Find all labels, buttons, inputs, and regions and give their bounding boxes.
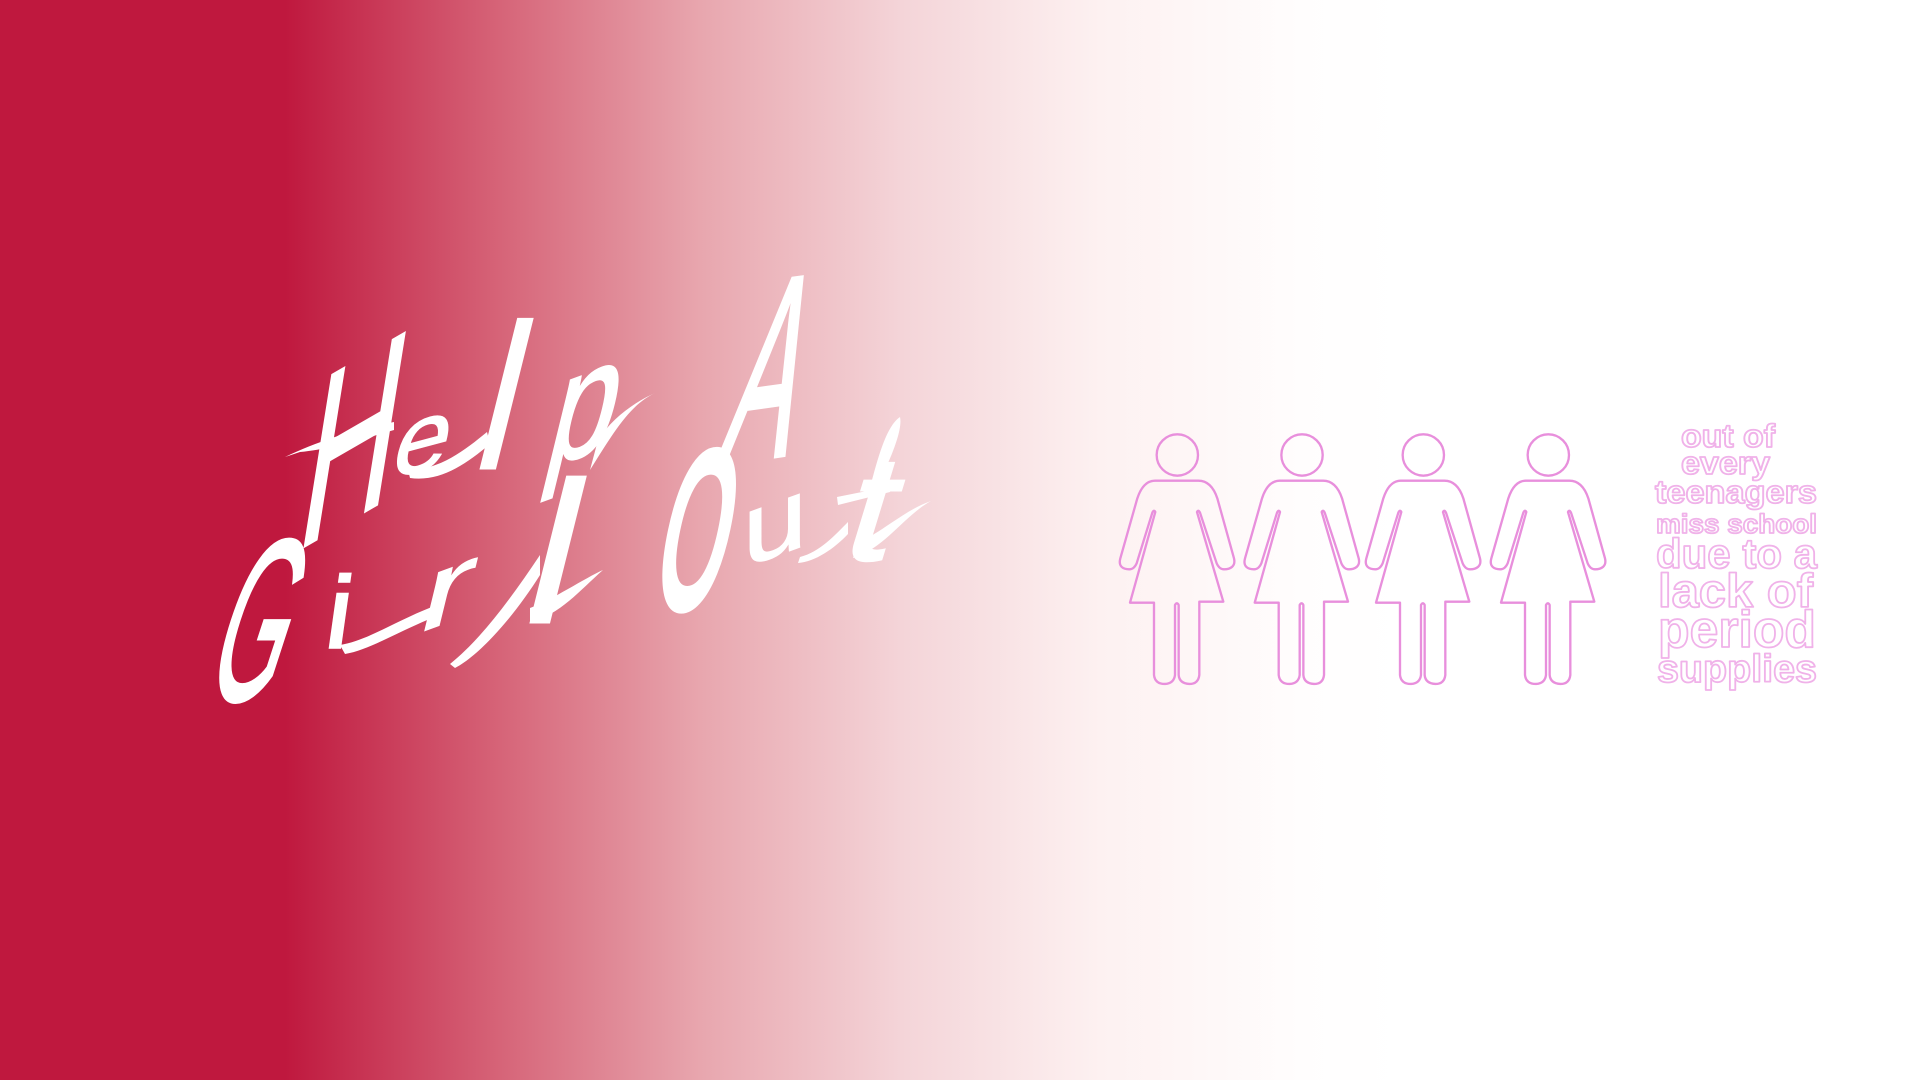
statistic text block: supplies bbox=[1657, 648, 1817, 691]
statistic text block bbox=[1655, 418, 1818, 691]
title word: Out bbox=[640, 408, 924, 654]
title word: Girl: i bbox=[319, 554, 361, 670]
title swashes bbox=[285, 393, 931, 668]
icon: woman 3 bbox=[1366, 434, 1480, 684]
title word: Girl: r bbox=[409, 517, 489, 658]
icon: woman 4 bbox=[1491, 434, 1605, 684]
icon: woman 1 bbox=[1120, 434, 1234, 684]
title word: Help bbox=[286, 274, 645, 605]
title word: Out: O bbox=[640, 408, 758, 654]
title word: Girl bbox=[185, 442, 607, 749]
statistic text block: out of bbox=[1681, 418, 1775, 454]
title: Help A Girl Out bbox=[185, 215, 931, 749]
title word: Girl: G bbox=[185, 492, 339, 749]
title word: Help: H bbox=[286, 274, 424, 605]
statistic text block: miss school bbox=[1656, 509, 1817, 539]
title word: A: A bbox=[700, 215, 847, 521]
statistic text block: lack of bbox=[1658, 564, 1813, 617]
title word: Help: p bbox=[533, 297, 645, 505]
title word: Help: l bbox=[459, 282, 552, 512]
pictogram row: four women bbox=[1120, 434, 1605, 684]
title word: Help: e bbox=[383, 374, 467, 502]
statistic text block: teenagers bbox=[1655, 474, 1817, 510]
statistic text block: every bbox=[1681, 445, 1770, 481]
statistic text block: period bbox=[1658, 601, 1816, 659]
title word: Out: t bbox=[828, 425, 924, 592]
icon: woman 2 bbox=[1244, 434, 1359, 684]
statistic text block: due to a bbox=[1656, 530, 1818, 577]
title word: Girl: l bbox=[507, 442, 607, 665]
title word: Out: u bbox=[743, 454, 807, 589]
